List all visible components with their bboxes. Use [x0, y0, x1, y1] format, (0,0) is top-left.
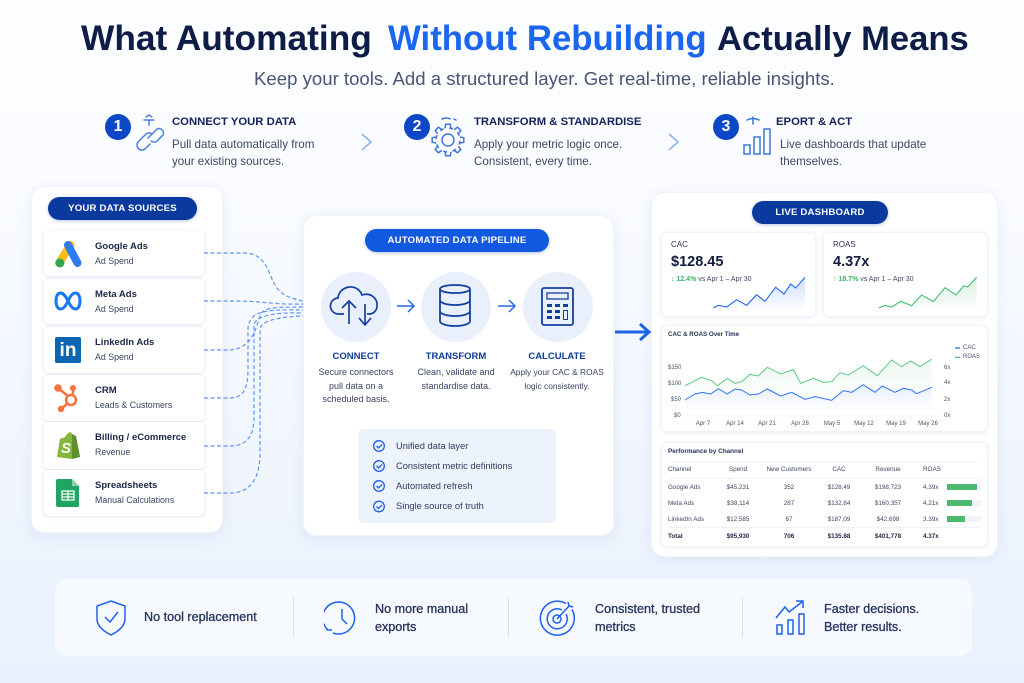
- performance table: 4.21x: [923, 500, 938, 507]
- chart labels: Apr 14: [726, 421, 744, 427]
- step 1 text: your existing sources.: [172, 155, 284, 168]
- step 1 number: 1: [114, 118, 122, 135]
- description: calculate: [510, 367, 604, 391]
- description: transform: Clean, validate and: [417, 367, 495, 377]
- step 3 text: Live dashboards that update: [780, 138, 926, 151]
- performance table: Spend: [729, 466, 747, 473]
- description: connect: [318, 367, 394, 404]
- description: transform: standardise data.: [421, 381, 491, 391]
- performance table: $135.88: [828, 533, 850, 540]
- performance table: $401,778: [875, 533, 901, 540]
- icon: calculator: [523, 272, 593, 342]
- description: connect: Secure connectors: [318, 367, 394, 377]
- label: calculate: CALCULATE: [528, 351, 586, 362]
- description: calculate: Apply your CAC & ROAS: [510, 367, 604, 377]
- source: Spreadsheets: Spreadsheets: [95, 480, 157, 491]
- benefit: consistent, trusted metrics: Consistent, trusted: [595, 602, 700, 616]
- benefit: no more manual exports: [375, 602, 468, 634]
- source: CRM: [44, 375, 204, 421]
- source: Billing / eCommerce: [44, 422, 204, 469]
- checklist item: Consistent metric definitions: [396, 461, 512, 471]
- KPI card: CAC: $128.45: [671, 254, 723, 270]
- benefit: faster decisions: [824, 602, 919, 634]
- icon: gear: [431, 117, 465, 156]
- step 2 text: [474, 138, 622, 168]
- source: Meta Ads: [44, 279, 204, 324]
- chart labels: $50: [671, 397, 681, 403]
- performance table: [668, 461, 981, 540]
- benefit: no more manual exports: exports: [375, 620, 416, 634]
- data sources heading: YOUR DATA SOURCES: [68, 203, 177, 214]
- chart labels: 0x: [944, 413, 950, 419]
- performance table: Meta Ads: [668, 500, 694, 507]
- chart labels: Apr 21: [758, 421, 776, 427]
- connector lines: [204, 252, 303, 494]
- benefit: no more manual exports: No more manual: [375, 602, 468, 616]
- step 1 text: Pull data automatically from: [172, 138, 314, 151]
- performance table: $12,585: [727, 516, 749, 523]
- chart labels: $100: [668, 381, 681, 387]
- source: Spreadsheets: Manual Calculations: [95, 495, 174, 505]
- checklist box: [358, 429, 556, 523]
- performance table: 287: [784, 500, 794, 507]
- step 2 text: Consistent, every time.: [474, 155, 592, 168]
- chart labels: May 19: [886, 421, 906, 427]
- title: Actually Means: [717, 20, 969, 58]
- icon: cloud connect: [321, 272, 391, 342]
- KPI card: CAC: CAC: [671, 240, 688, 249]
- source: LinkedIn Ads: [44, 327, 204, 373]
- benefit: consistent, trusted metrics: [595, 602, 700, 634]
- line chart: [684, 347, 960, 416]
- arrow: pipeline to dashboard: [615, 323, 651, 341]
- performance table: 3.39x: [923, 516, 938, 523]
- performance table: Google Ads: [668, 484, 701, 491]
- performance table: $95,930: [727, 533, 749, 540]
- performance table: 706: [784, 533, 794, 540]
- icon: target: [540, 600, 576, 636]
- description: calculate: logic consistently.: [524, 381, 590, 391]
- KPI card: ROAS: [823, 232, 988, 317]
- performance table: ROAS: [923, 466, 941, 473]
- performance table: Channel: [668, 466, 691, 473]
- table title: Performance by Channel: [668, 448, 743, 455]
- description: connect: pull data on a: [329, 381, 383, 391]
- label: connect: CONNECT: [333, 351, 379, 362]
- chart title: CAC & ROAS Over Time: [668, 331, 739, 338]
- label: transform: TRANSFORM: [426, 351, 486, 362]
- icon: clock: [324, 601, 356, 635]
- arrow: step 2 to 3: [668, 134, 679, 150]
- benefit: no tool replacement: No tool replacement: [144, 610, 257, 624]
- performance table: $42,698: [877, 516, 899, 523]
- performance table: $132,84: [828, 500, 850, 507]
- chart labels: $0: [674, 413, 681, 419]
- KPI card: CAC: [661, 232, 816, 317]
- subtitle: Keep your tools. Add a structured layer. Get real-time, reliable insights.: [254, 68, 835, 89]
- check icons: [373, 440, 385, 512]
- source: Spreadsheets: [44, 470, 204, 516]
- table card: performance by channel: [661, 442, 988, 547]
- step 3 text: [780, 138, 926, 168]
- checklist item: Unified data layer: [396, 441, 468, 451]
- panel: benefits: [55, 579, 972, 656]
- performance table: 4.39x: [923, 484, 938, 491]
- chart labels: May 26: [918, 421, 938, 427]
- title: Without Rebuilding: [388, 19, 707, 58]
- step 3 number: 3: [722, 118, 730, 135]
- description: connect: scheduled basis.: [322, 394, 390, 404]
- chart labels: 4x: [944, 380, 950, 386]
- chart labels: 2x: [944, 397, 950, 403]
- dashboard heading: [752, 201, 888, 224]
- chart labels: May 12: [854, 421, 874, 427]
- step 1 heading: CONNECT YOUR DATA: [172, 116, 296, 128]
- data sources heading: [48, 197, 197, 220]
- checklist item: Single source of truth: [396, 501, 484, 511]
- pipeline heading: AUTOMATED DATA PIPELINE: [388, 235, 526, 246]
- performance table: 4.37x: [923, 533, 939, 540]
- step 2 number: [404, 114, 430, 140]
- step 2 heading: TRANSFORM & STANDARDISE: [474, 116, 641, 128]
- benefit: faster decisions: Faster decisions.: [824, 602, 919, 616]
- step 2 text: Apply your metric logic once.: [474, 138, 622, 151]
- icon: database: [421, 272, 491, 342]
- KPI card: CAC: ↓ 12.4% vs Apr 1 – Apr 30: [671, 276, 752, 283]
- panel: data sources: [31, 186, 223, 533]
- icon: chain link: [136, 114, 164, 151]
- performance table: $45,231: [727, 484, 749, 491]
- source: LinkedIn Ads: in: [60, 340, 76, 361]
- chart labels: 6x: [944, 365, 950, 371]
- performance table: $160,357: [875, 500, 901, 507]
- arrow: transform to calculate: [498, 300, 516, 312]
- KPI card: ROAS: ↑ 18.7% vs Apr 1 – Apr 30: [833, 276, 914, 283]
- source: Google Ads: Google Ads: [95, 241, 148, 252]
- chart labels: CAC: [963, 345, 976, 351]
- panel: automated data pipeline: [303, 215, 614, 536]
- source: Billing / eCommerce: Billing / eCommerce: [95, 432, 186, 443]
- chart labels: ROAS: [963, 354, 980, 360]
- source: CRM: CRM: [95, 385, 117, 396]
- source: Billing / eCommerce: S: [61, 440, 71, 457]
- chart labels: Apr 7: [696, 421, 710, 427]
- source: LinkedIn Ads: LinkedIn Ads: [95, 337, 154, 348]
- title: [81, 19, 969, 58]
- source: Google Ads: [44, 231, 204, 276]
- checklist item: Automated refresh: [396, 481, 472, 491]
- chart labels: Apr 28: [791, 421, 809, 427]
- performance table: CAC: [832, 466, 846, 473]
- step 2 number: 2: [413, 118, 421, 135]
- step 1 number: [105, 114, 131, 140]
- performance table: 67: [785, 516, 793, 523]
- performance table: $187,09: [828, 516, 850, 523]
- icon: bar chart with arrow: [743, 116, 771, 155]
- title: What Automating: [81, 19, 372, 58]
- step 3 text: themselves.: [780, 155, 842, 168]
- KPI card: ROAS: 4.37x: [833, 254, 869, 270]
- chart labels: [668, 344, 980, 427]
- step 3 heading: EPORT & ACT: [776, 116, 852, 128]
- panel: live dashboard: [651, 192, 998, 557]
- description: transform: [417, 367, 495, 391]
- icon: shield: [96, 600, 126, 636]
- chart labels: $150: [668, 365, 681, 371]
- source: CRM: Leads & Customers: [95, 400, 172, 410]
- icon: growth chart: [776, 600, 805, 635]
- performance table: 352: [784, 484, 794, 491]
- arrow: step 1 to 2: [362, 134, 372, 150]
- step 3 number: [713, 114, 739, 140]
- source: Meta Ads: Meta Ads: [95, 289, 137, 300]
- performance table: $38,114: [727, 500, 749, 507]
- chart labels: May 5: [824, 421, 840, 427]
- performance table: New Customers: [767, 466, 811, 473]
- source: Meta Ads: Ad Spend: [95, 304, 134, 314]
- source: Billing / eCommerce: Revenue: [95, 447, 130, 457]
- dashboard heading: LIVE DASHBOARD: [775, 207, 865, 218]
- benefit: consistent, trusted metrics: metrics: [595, 620, 636, 634]
- sparklines: [713, 276, 977, 308]
- pipeline heading: [365, 229, 549, 252]
- source: Google Ads: Ad Spend: [95, 256, 134, 266]
- arrow: connect to transform: [397, 300, 415, 312]
- performance table: LinkedIn Ads: [668, 516, 704, 523]
- chart card: CAC & ROAS over time: [661, 325, 988, 432]
- performance table: Revenue: [875, 466, 901, 473]
- performance table: $198,723: [875, 484, 901, 491]
- performance table: Total: [668, 533, 683, 540]
- benefit: faster decisions: Better results.: [824, 620, 902, 634]
- performance table: $128,49: [828, 484, 850, 491]
- KPI card: ROAS: ROAS: [833, 240, 856, 249]
- step 1 text: [172, 138, 314, 168]
- source: LinkedIn Ads: Ad Spend: [95, 352, 134, 362]
